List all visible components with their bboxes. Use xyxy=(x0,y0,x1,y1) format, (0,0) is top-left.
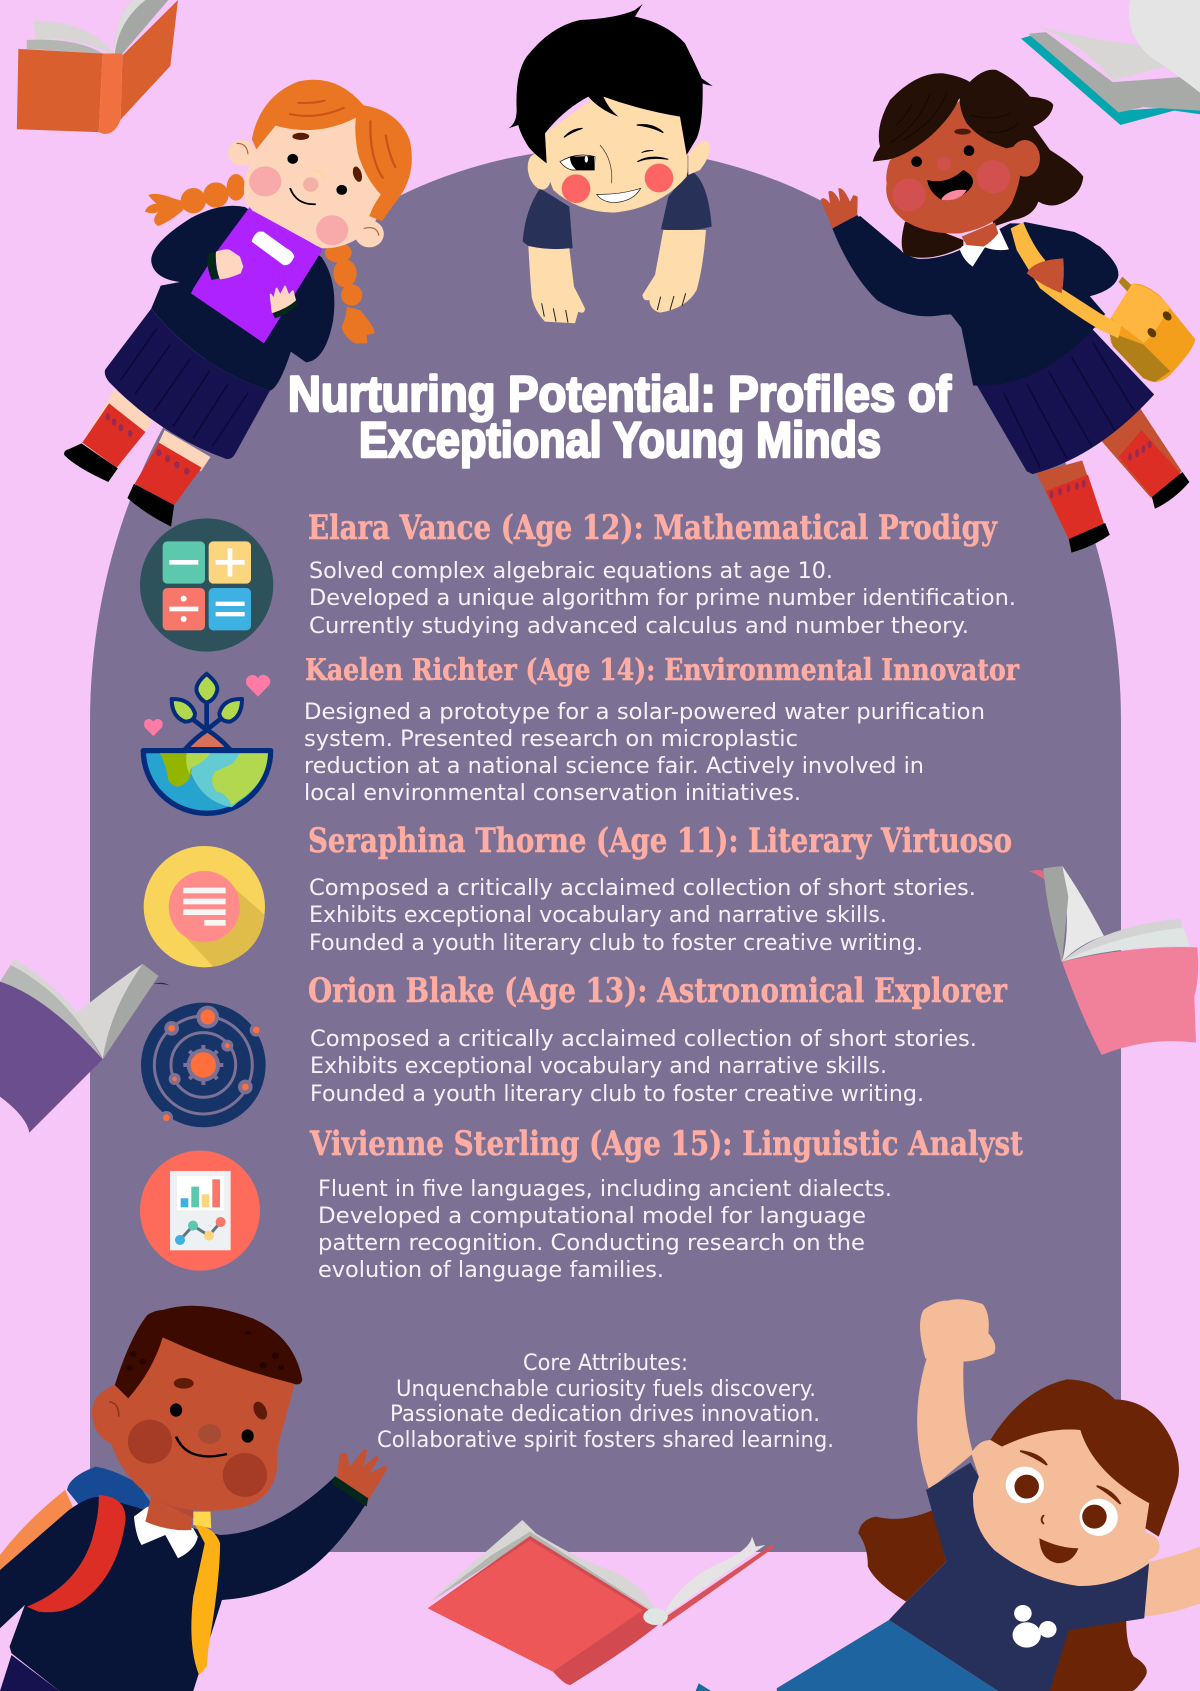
profile: Orion Blake xyxy=(308,971,1008,1107)
profile: Seraphina Thorne: Exhibits exceptional vocabulary and narrative skills. xyxy=(309,903,887,928)
profile: Seraphina Thorne: Founded a youth literary club to foster creative writing. xyxy=(309,931,923,956)
profile: Kaelen Richter: local environmental conservation initiatives. xyxy=(304,781,801,806)
character: boy peeking over the arch xyxy=(508,4,713,323)
profile: Kaelen Richter: Designed a prototype for a solar-powered water purification xyxy=(304,700,985,725)
profile: Vivienne Sterling: Developed a computational model for language xyxy=(318,1204,866,1229)
profile: Vivienne Sterling xyxy=(309,1124,1023,1283)
profile: Orion Blake: Composed a critically acclaimed collection of short stories. xyxy=(310,1027,977,1052)
character: girl with satchel waving xyxy=(821,70,1195,553)
profile: Kaelen Richter: system. Presented research on microplastic xyxy=(304,727,798,752)
title: Exceptional Young Minds xyxy=(359,412,881,468)
profile: Orion Blake: Orion Blake (Age 13): Astronomical Explorer xyxy=(308,971,1008,1011)
book: pink right xyxy=(1029,866,1198,1055)
text block: core attributes xyxy=(377,1351,834,1453)
character: girl raising fist xyxy=(696,1299,1200,1691)
title xyxy=(288,366,951,468)
profile: Vivienne Sterling: Fluent in five languages, including ancient dialects. xyxy=(318,1177,892,1202)
profile: Orion Blake: Exhibits exceptional vocabulary and narrative skills. xyxy=(310,1054,887,1079)
text block: core attributes: Passionate dedication drives innovation. xyxy=(390,1402,820,1427)
book: purple left xyxy=(0,959,169,1133)
title: Nurturing Potential: Profiles of xyxy=(288,366,951,422)
icon: report with charts xyxy=(140,1151,260,1271)
profile: Elara Vance: Developed a unique algorithm for prime number identification. xyxy=(309,586,1016,611)
character: boy with backpack waving xyxy=(0,1306,387,1691)
text block: core attributes: Collaborative spirit fosters shared learning. xyxy=(377,1428,834,1453)
profile: Vivienne Sterling: Vivienne Sterling (Age 15): Linguistic Analyst xyxy=(309,1124,1023,1164)
text block: core attributes: Unquenchable curiosity fuels discovery. xyxy=(396,1377,816,1402)
profile: Seraphina Thorne: Seraphina Thorne (Age 11): Literary Virtuoso xyxy=(308,821,1012,861)
character: girl with orange braids and purple book xyxy=(64,80,412,527)
profile: Kaelen Richter xyxy=(304,653,1020,806)
profile: Kaelen Richter: Kaelen Richter (Age 14): Environmental Innovator xyxy=(305,653,1020,688)
book: teal top right xyxy=(1021,0,1200,125)
profile: Kaelen Richter: reduction at a national science fair. Actively involved in xyxy=(304,754,924,779)
profile: Elara Vance: Elara Vance (Age 12): Mathematical Prodigy xyxy=(308,508,998,548)
profile: Vivienne Sterling: evolution of language families. xyxy=(318,1258,664,1283)
profile: Elara Vance xyxy=(308,508,1016,639)
profile: Seraphina Thorne xyxy=(308,821,1012,956)
panel: arched content panel xyxy=(90,148,1121,1552)
icon: solar system xyxy=(141,1003,266,1127)
profile: Seraphina Thorne: Composed a critically acclaimed collection of short stories. xyxy=(309,876,976,901)
book: red bottom centre xyxy=(428,1520,774,1685)
profile: Elara Vance: Solved complex algebraic equations at age 10. xyxy=(309,559,833,584)
book: orange top left xyxy=(17,0,178,134)
text block: core attributes: Core Attributes: xyxy=(523,1351,688,1376)
profile: Elara Vance: Currently studying advanced calculus and number theory. xyxy=(309,614,969,639)
profile: Vivienne Sterling: pattern recognition. Conducting research on the xyxy=(318,1231,865,1256)
icon: document badge xyxy=(144,846,265,967)
icon: calculator xyxy=(140,518,273,652)
profile: Orion Blake: Founded a youth literary club to foster creative writing. xyxy=(310,1082,924,1107)
icon: earth bowl with sprout xyxy=(143,674,271,813)
